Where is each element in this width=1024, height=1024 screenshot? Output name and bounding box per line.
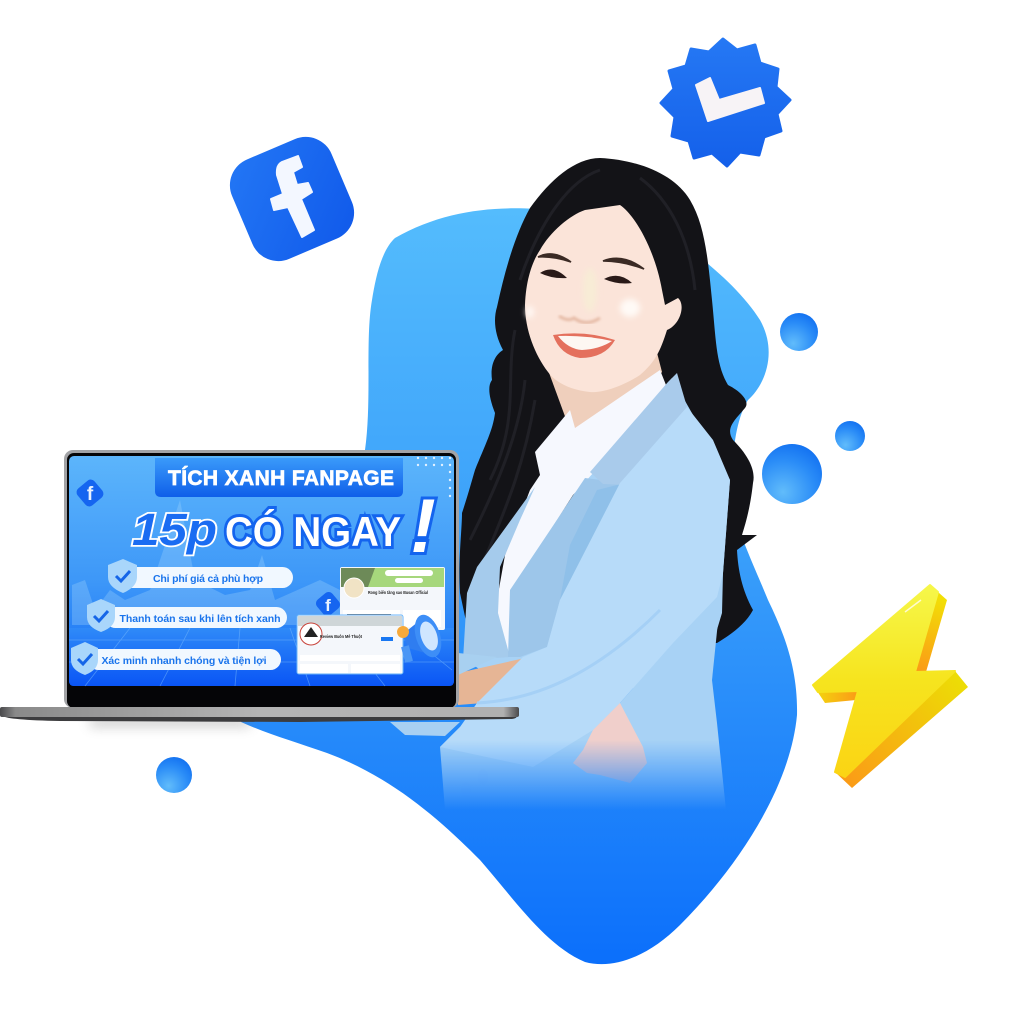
screen icon: facebook [75,478,105,508]
cuff under laptop [390,722,460,736]
icon: facebook tile [221,128,363,270]
benefit 3: Xác minh nhanh chóng và tiện lợi [102,655,267,667]
screen headline: 15p [132,504,217,555]
screen title banner [155,458,403,497]
upper lapel [590,373,687,485]
screen icon: small facebook [314,590,342,618]
laptop frame [64,450,459,708]
floor grid [69,628,454,686]
blazer [390,373,730,810]
mouth [553,333,615,358]
screen icon: small facebook: f [325,596,331,615]
sleeve [440,407,730,767]
laptop shadow [90,718,250,726]
buttons [478,769,488,785]
nose shadow [559,316,600,322]
hair [459,158,757,643]
neck [548,345,662,470]
lapel shadow [560,485,619,598]
hand [573,703,647,783]
cheek highlights [526,268,640,318]
screen icon: facebook: f [87,484,94,505]
decorative dots [156,313,865,793]
fanpage card 1 [340,567,445,630]
torso base [467,378,730,700]
screen headline [132,484,436,569]
brows [538,254,644,269]
inner lapel [508,478,625,657]
left blazer panel [463,487,535,660]
benefit 3 [71,642,281,675]
floor [69,628,454,686]
shirt [497,370,668,657]
screen headline: CÓ NGAY [225,507,401,555]
blazer body [440,573,726,810]
benefit 1: Chi phí giá cả phù hợp [153,573,263,585]
icon: verified badge [661,39,790,166]
fanpage card 2: Review Buôn Mê Thuột [320,634,362,639]
benefit 1 [108,559,293,593]
icon: megaphone [397,611,446,663]
left forearm [458,658,525,705]
laptop base [0,707,519,722]
laptop [0,450,519,726]
benefit 2 [87,599,287,632]
screen headline: ! [410,484,436,569]
person [390,158,757,810]
fanpage card 1: Rong biển tăng sao Busan Official [368,590,428,595]
screen title banner: TÍCH XANH FANPAGE [168,467,394,490]
blue blob background [241,208,797,964]
face [525,205,682,392]
fanpage card 2 [297,615,403,674]
benefit 2: Thanh toán sau khi lên tích xanh [120,613,280,625]
sleeve fold [477,610,660,703]
skyline [72,500,340,625]
screen [69,456,454,686]
dot grid [417,457,451,497]
eyes [540,269,632,284]
icon: lightning bolt [813,585,968,788]
